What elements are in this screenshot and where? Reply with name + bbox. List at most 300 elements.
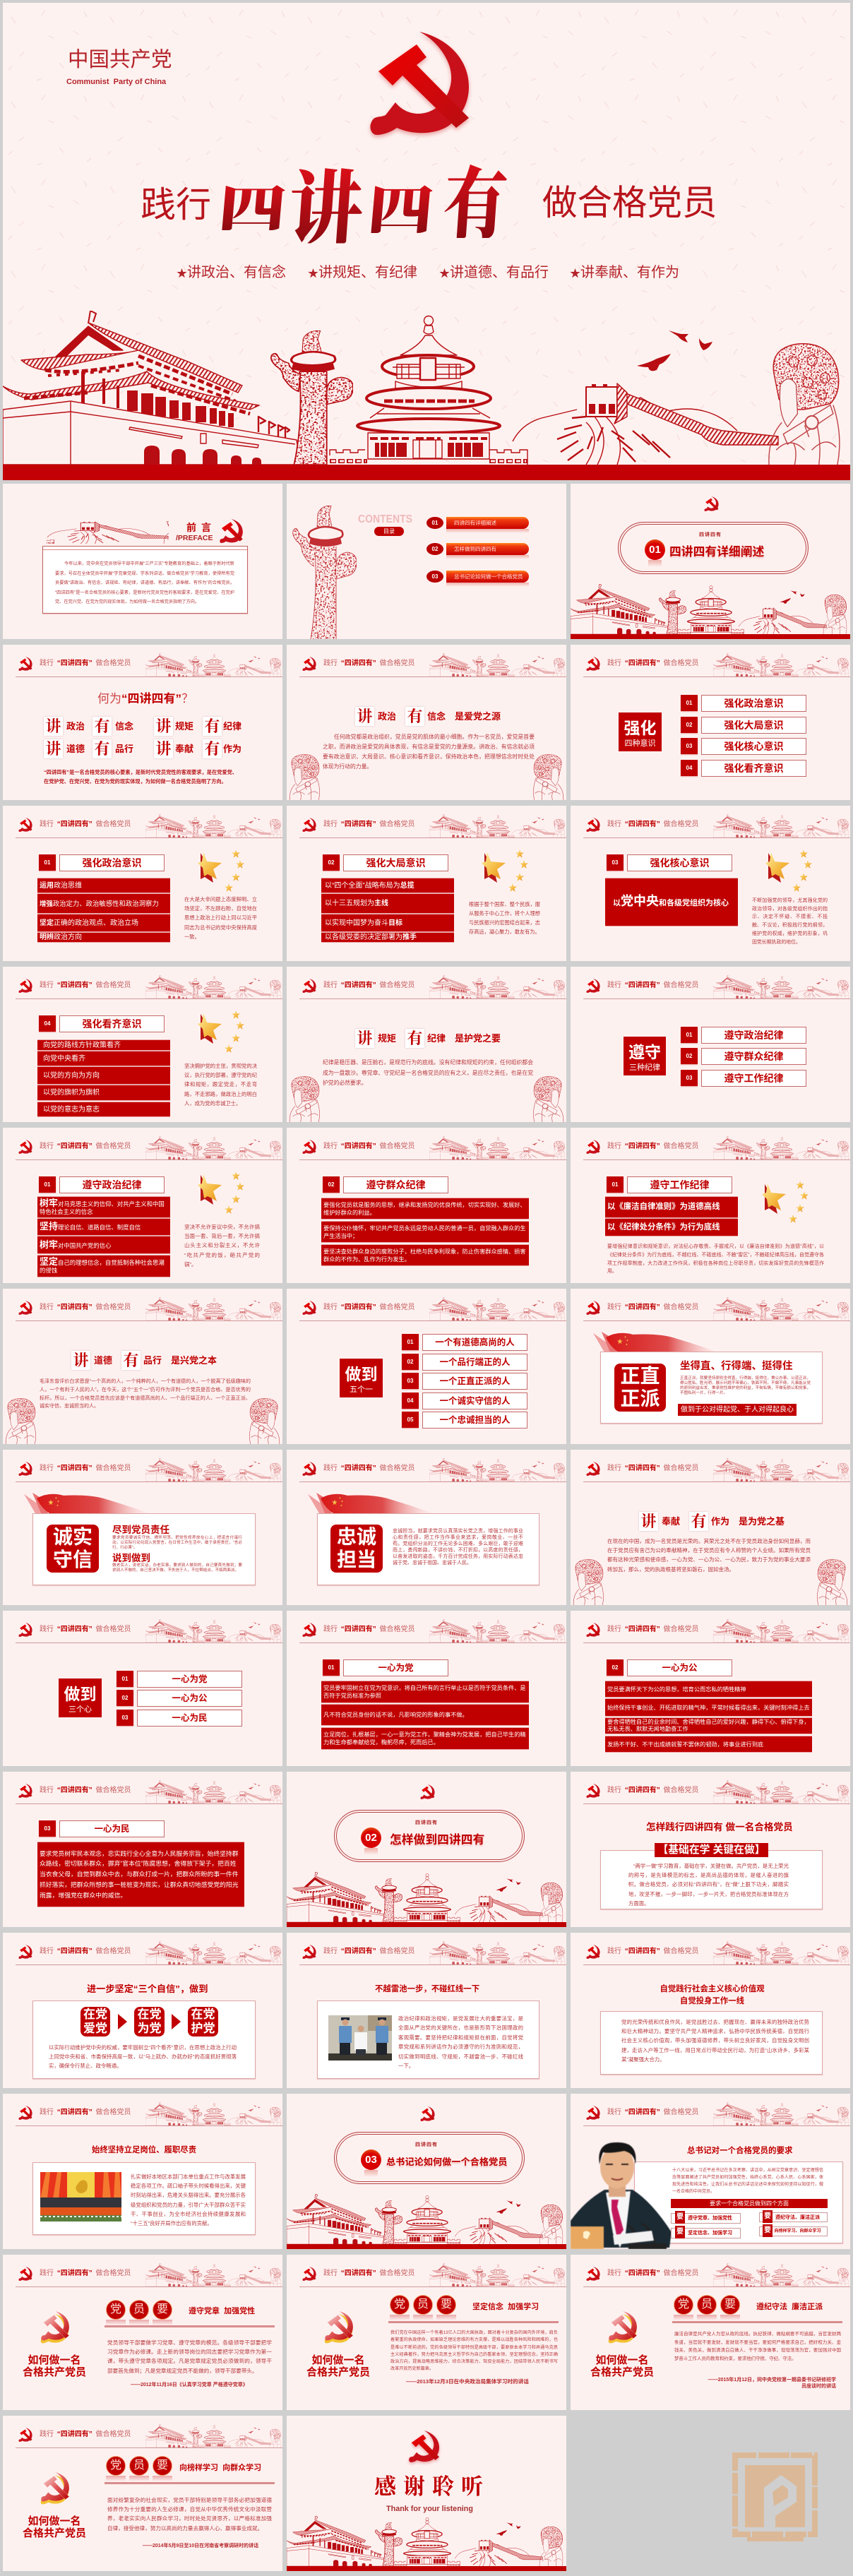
slide header: 践行 “四讲四有” 做合格党员 [323, 660, 415, 667]
box 3 [188, 2007, 218, 2037]
row 2 [321, 1705, 529, 1725]
body text: 党员领导干部要做学习党章、遵守党章的模范。各级领导干部要把学习党章作为必修课。走上新的领导岗位的同志要把学习党章作为第一课，带头遵守党章各项规定。凡是党章规定党员必须做到的，领导干部要首先做到；凡是党章规定党员不能做的，领导干部要带头。 [107, 2339, 272, 2374]
icon: emblem [419, 2106, 436, 2121]
item 03: 强化核心意识 [724, 741, 784, 752]
heading with tiles: 规矩 [378, 1033, 396, 1044]
subtitle: four pledges: ★讲奉献、有作为 [570, 265, 679, 280]
photo: court scene [328, 2015, 392, 2061]
grid of four pledges: 有 [94, 715, 110, 737]
subtitle: four pledges: ★讲政治、有信念 [177, 265, 286, 280]
requirement 1 [671, 2211, 741, 2224]
panel: firm belief [287, 2255, 566, 2410]
item 03 [117, 1710, 242, 1727]
heading with tiles: 道德 [94, 1355, 112, 1366]
slide header: 践行 “四讲四有” 做合格党员 [40, 1787, 131, 1794]
row 2 [37, 1051, 170, 1066]
icon: hammer and sickle emblem [368, 32, 472, 140]
heading: 怎样践行四讲四有 做一名合格党员 [646, 1822, 793, 1832]
section pill [334, 2132, 525, 2184]
card title: 02 [328, 859, 334, 866]
card [317, 2000, 539, 2079]
section number [645, 539, 665, 560]
row 3 [37, 1067, 170, 1084]
box 2 [134, 2007, 165, 2037]
item 04 [681, 760, 806, 777]
slide header [3, 2416, 282, 2448]
slide header: 践行 “四讲四有” 做合格党员 [323, 821, 415, 828]
card title: 强化大局意识 [366, 857, 425, 869]
red callout: 做到于公对得起党、于人对得起良心 [681, 1406, 794, 1414]
section number: 02 [365, 1832, 377, 1844]
subheading: english party name: Communist Party of China [66, 78, 166, 86]
item 02: 一个品行端正的人 [439, 1357, 510, 1367]
item 01 [681, 695, 806, 712]
panel: learn from role models [3, 2416, 282, 2571]
item 01 [117, 1671, 242, 1688]
heading: preface: 前言 [186, 522, 216, 533]
panel: five ones [287, 1289, 566, 1444]
panel: hero cover slide [3, 3, 850, 480]
icon: stars [760, 1181, 810, 1224]
subheading: 坚定信念 加强学习 [472, 2303, 539, 2311]
heading with tiles: 有 [123, 1349, 138, 1371]
slide header [16, 814, 282, 838]
row 1 [605, 1197, 738, 1217]
illustration: right lion [249, 1397, 282, 1444]
row 4 [37, 1085, 170, 1100]
badge: 担当 [337, 1549, 376, 1570]
icon: emblem [409, 2431, 439, 2462]
footer band [287, 2566, 566, 2571]
item 03: 一个正直正派的人 [439, 1376, 510, 1386]
panel: devoted to the people [3, 1772, 282, 1927]
subheading: 遵纪守法 廉洁正派 [756, 2303, 823, 2311]
slide header [571, 1289, 850, 1321]
row 4: 发扬不干好、不干出成绩就誓不罢休的韧劲，将事业进行到底 [607, 1741, 763, 1747]
heading: how to be a party member: 如何做一名 [311, 2354, 364, 2366]
heading with tiles: 讲 [640, 1510, 657, 1532]
grid of four pledges: 规矩 [175, 721, 193, 732]
subtitle: four pledges: ★讲规矩、有纪律 [308, 265, 417, 280]
panel: contents [287, 484, 566, 639]
section pill [618, 522, 809, 574]
heading: 总书记对一个合格党员的要求 [687, 2147, 792, 2155]
body text: 我们党在中国这样一个有着13亿人口的大国执政，面对着十分复杂的国内外环境，肩负着繁重的执政使命，如果缺乏理论思维的有力支撑，是难以战胜各种风险和困难的，也是难以不断前进的。党的各级领导干部特别是高级干部，要原原本本学习和弄通马克思主义经典著作，努力把马克思主义哲学作为自己的看家本领，坚定理想信念，坚持正确政治方向，提高战略思维能力、综合决策能力、驾驭全局能力，团结带领人民不断书写改革开放历史新篇章。 [390, 2330, 558, 2371]
slide header: 践行 “四讲四有” 做合格党员 [323, 982, 415, 989]
title: calligraphic 四讲四有 [215, 141, 512, 261]
heading: how to be a party member: 合格共产党员 [23, 2527, 86, 2539]
side text: 根据于整个国家、整个民族，服从服务于中心工作，将个人理想与民族振兴的宏图结合起来，志存高远，凝心聚力，敢友有为。 [469, 901, 540, 935]
row 1: 运用政治思维 [40, 881, 82, 890]
row 3: 坚定正确的政治观点、政治立场 [40, 919, 138, 926]
card heading: 坐得直、行得端、挺得住 [680, 1361, 792, 1372]
illustration: great wall [47, 521, 169, 544]
heading with tiles: 讲 [357, 1027, 373, 1049]
card [600, 2011, 823, 2075]
slide header: 践行 “四讲四有” 做合格党员 [607, 982, 699, 989]
panel: work discipline [571, 1128, 850, 1283]
slide header [3, 1289, 282, 1321]
heading 2: 说到做到 [112, 1553, 150, 1563]
icon: glossy emblem [606, 2306, 640, 2344]
item 05 [402, 1412, 527, 1429]
badges: 党员要: 党 [110, 2303, 121, 2315]
slide header [571, 1933, 850, 1965]
slide header [287, 2255, 566, 2287]
panel: core awareness [571, 806, 850, 961]
slide header: 践行 “四讲四有” 做合格党员 [607, 1143, 699, 1150]
badge [47, 1525, 99, 1573]
list item 03 [426, 571, 529, 586]
label: catalogue [374, 527, 404, 536]
section number [361, 1827, 381, 1848]
slide header [287, 1933, 566, 1965]
grid of four pledges: 奉献 [175, 744, 193, 754]
item 01: 01 [122, 1676, 128, 1682]
badges: 党员要 [390, 2295, 457, 2321]
card title [606, 854, 732, 871]
row 4: 以党的旗帜为旗帜 [43, 1089, 100, 1097]
slide header [3, 1933, 282, 1965]
slide header [287, 1289, 566, 1321]
card title [323, 1659, 448, 1676]
row 3 [37, 914, 170, 931]
row 5: 以党的意志为意志 [43, 1106, 100, 1113]
panel: learn and act [571, 1772, 850, 1927]
card title [607, 1659, 732, 1676]
text box: preface body [42, 546, 248, 614]
illustration: skyline [571, 584, 847, 634]
illustration: skyline [287, 1872, 566, 1922]
panel: aligned awareness [3, 967, 282, 1122]
card title [38, 854, 165, 871]
grid of four pledges: 有 [204, 737, 220, 759]
panel: four awarenesses [571, 645, 850, 800]
item 03: 一心为民 [172, 1713, 208, 1723]
row 4: 坚定自己的理想信念，自觉抵制各种社会思潮的侵蚀 [40, 1256, 165, 1274]
box 1 [80, 2007, 110, 2037]
item 02: 一心为公 [172, 1693, 208, 1703]
requirement 3: 遵纪守法、廉洁正派 [775, 2215, 820, 2220]
icon: emblem [220, 519, 243, 543]
slide header [571, 967, 850, 999]
row 2 [605, 1219, 738, 1236]
red label box [340, 1359, 383, 1397]
card [32, 2162, 256, 2235]
row 4 [37, 933, 170, 942]
slide header: 践行 “四讲四有” 做合格党员 [323, 2270, 415, 2277]
row 3 [321, 1728, 529, 1749]
heading with tiles: 奉献 [662, 1516, 680, 1527]
small text 2: 做老实人，说老实话，办老实事。要求别人做到的，自己要首先做到；要求别人不做的，自己坚决不做。不失信于人，不拉帮结派，不搞两面派。 [112, 1563, 242, 1573]
item 01: 一心为党 [172, 1674, 208, 1684]
item 03: 03 [407, 1378, 413, 1384]
slide header [287, 1450, 566, 1482]
heading with tiles: 作为 [711, 1516, 729, 1527]
title: calligraphic 四讲四有: 四 [364, 167, 438, 245]
row 3: 以党的方向为方向 [43, 1072, 100, 1079]
small text 1: 要求党员要诚实守信、襟怀坦荡，把党性修养放在心上，把诺言付诸行动，以实际行动兑现入党誓言，在日常工作生活中，敢于承担责任，“言必行、行必果”。 [112, 1536, 242, 1550]
panel: section 03 [287, 2094, 566, 2249]
row 2 [321, 1222, 529, 1242]
subtitle: four pledges: ★讲道德、有品行 [439, 265, 549, 280]
heading with tiles [71, 1351, 217, 1370]
row 2: 始终保持干事创业、开拓进取的精气神，平常时候看得出来，关键时刻冲得上去 [607, 1705, 810, 1710]
heading: 自觉投身工作一线 [680, 1997, 744, 2005]
red label box [624, 1037, 666, 1075]
heading: 始终坚持立足岗位、履职尽责 [92, 2146, 196, 2154]
heading with tiles: 信念 [427, 711, 446, 722]
body text: 毛泽东曾评价白求恩是“一个高尚的人，一个纯粹的人，一个有道德的人，一个脱离了低级趣味的人，一个有利于人民的人”。在今天，这个“五个一”仍可作为评判一个党员是否合格、是否优秀的标杆。所以，一个合格党员首先应该是个有道德高尚的人、一个品行端正的人、一个正直正派、诚实守信、忠诚担当的人。 [40, 1379, 251, 1409]
slide header [571, 2255, 850, 2287]
slide header [299, 975, 566, 999]
body text: 要增强纪律意识和规矩意识，对法纪心存敬畏、手握戒尺，以《廉洁自律准则》为道德“高线”，以《纪律处分条件》为行为底线，不越红线、不碰底线、不触“雷区”，不触碰纪律高压线，自觉遵守各项工作规章制度，大力改进工作作风，积极在各种岗位上尽职尽责，切实发挥好党员的先锋模范作用。 [607, 1244, 824, 1274]
source citation: ——2012年11月16日《认真学习党章 严格遵守党章》 [131, 2383, 248, 2387]
heading: 何为“四讲四有”？ [97, 692, 193, 705]
card title: 01 [328, 1664, 334, 1671]
badge [330, 1525, 383, 1573]
panel: three disciplines [571, 967, 850, 1122]
badges: 党员要: 党 [394, 2298, 405, 2310]
row 2: 要保持公仆情怀，牢记共产党员永远是劳动人民的普通一员，自觉融入群众的生产生活当中； [323, 1224, 526, 1239]
requirement 4: 向榜样学习、向群众学习 [774, 2229, 821, 2234]
slide header: 践行 “四讲四有” 做合格党员 [323, 1143, 415, 1150]
row 2: 增强政治定力、政治敏感性和政治洞察力 [40, 900, 159, 907]
row 1 [37, 1040, 170, 1050]
body text: 以实际行动维护党中央的权威，要牢固树立“四个看齐”意识，在思想上政治上行动上同党中央和省、市委保持高度一致，以“马上就办、办就办好”的态度抓好贯彻落实，确保令行禁止、政令畅通。 [49, 2044, 237, 2069]
icon: stars [482, 849, 528, 892]
card title: 一心为公 [662, 1663, 698, 1673]
icon: stars [198, 849, 244, 892]
row 1 [321, 1198, 529, 1219]
slide header [583, 814, 850, 838]
card [32, 1513, 256, 1585]
requirement 2 [671, 2226, 741, 2238]
badges: 党员要: 党 [110, 2459, 121, 2471]
item 02: 遵守群众纪律 [724, 1051, 784, 1062]
red label box: 三个心 [68, 1705, 92, 1714]
heading: 进一步坚定“三个自信”，做到 [87, 1984, 208, 1994]
panel: speak politics [287, 645, 566, 800]
photo: speaker at podium [571, 2142, 672, 2249]
requirement 4 [759, 2224, 828, 2237]
row 2 [605, 1699, 812, 1716]
red label box: 做到 [345, 1365, 377, 1383]
red label box: 五个一 [350, 1385, 373, 1394]
item 02: 02 [407, 1359, 413, 1365]
section pill [334, 1810, 525, 1862]
card title: 遵守政治纪律 [82, 1179, 141, 1191]
section kicker: 四讲四有 [415, 2142, 438, 2147]
list item 01: 四讲四有详细阐述 [454, 520, 496, 526]
badges: 党员要: 要 [441, 2298, 452, 2310]
heading: how to be a party member [590, 2354, 654, 2378]
box 1: 爱党 [83, 2022, 107, 2035]
badges: 党员要: 要 [157, 2459, 168, 2471]
box 2: 为党 [137, 2022, 161, 2035]
heading: how to be a party member [23, 2354, 86, 2378]
slide header: 践行 “四讲四有” 做合格党员 [323, 1304, 415, 1311]
heading: how to be a party member: 如何做一名 [28, 2354, 80, 2366]
illustration: right lion [817, 1558, 850, 1605]
subheading: 向榜样学习 向群众学习 [179, 2464, 261, 2472]
slide header [3, 1772, 282, 1804]
row 3: 以实现中国梦为奋斗目标 [325, 919, 402, 926]
card [317, 1513, 539, 1585]
subtitle: four pledges [177, 264, 679, 280]
box 3: 护党 [191, 2022, 215, 2035]
slide header: 践行 “四讲四有” 做合格党员 [40, 660, 131, 667]
row 1: 以“四个全面”战略布局为总揽 [325, 881, 414, 890]
item 03: 03 [122, 1715, 128, 1721]
box 2: 在党 [137, 2008, 161, 2021]
slide header: 践行 “四讲四有” 做合格党员 [607, 1948, 699, 1955]
body text: 扎实做好本地区本部门本单位重点工作与改革发展稳定各项工作。疏口袖子带头时候看得出来，关键时刻站得出来，危难关头豁得出来。要充分展示各级党组织和党员的力量，引导广大干部群众苦干实干、干事创业，为全市经济社会持续健康发展和“十三五”良好开局作出应有的贡献。 [131, 2174, 246, 2226]
badge [614, 1364, 666, 1412]
slide header [571, 1611, 850, 1643]
heading with tiles: 是护党之要 [455, 1033, 501, 1044]
card [634, 2161, 843, 2243]
panel: what is four-speak four-have [3, 645, 282, 800]
title: calligraphic 四讲四有: 有 [440, 141, 512, 256]
item 02: 02 [122, 1695, 128, 1701]
slide header: 践行 “四讲四有” 做合格党员 [607, 2270, 699, 2277]
card title: 03 [612, 859, 618, 866]
number reflection [648, 560, 662, 567]
red label box [59, 1678, 102, 1717]
item 01: 一个有道德高尚的人 [435, 1337, 515, 1347]
red statement box: 以党中央和各级党组织为核心 [613, 894, 729, 908]
panel: three hearts [3, 1611, 282, 1766]
item 01: 01 [686, 1032, 692, 1038]
card title [322, 854, 448, 871]
list item 03: 03 [432, 573, 438, 580]
badge: 忠诚 [337, 1526, 376, 1548]
card title: 遵守工作纪律 [650, 1179, 709, 1191]
card title: 03 [44, 1825, 50, 1832]
card title: 一心为民 [94, 1824, 130, 1834]
item 02: 02 [686, 722, 692, 728]
section kicker: 四讲四有 [415, 1820, 438, 1825]
body text: 廉洁自律是共产党人为官从政的底线。执纪铁律、做贴纲要不可逾越，当官发财两条道，当官就不要发财，发财就不要当官。要如何严格要求自己，把好权力关、金钱关、美色关，做到清清白白做人、干干净净做事，坦坦荡荡为官，要加强对中国梦奋斗工作人员的教育和约束，要求他们守德、守纪、守法。 [674, 2332, 841, 2361]
heading: how to be a party member: 合格共产党员 [590, 2366, 654, 2378]
heading with tiles: 讲 [73, 1349, 89, 1371]
illustration: huabiao column [292, 506, 357, 639]
badges: 党员要: 员 [417, 2298, 429, 2310]
card [600, 1352, 823, 1424]
slide header [16, 975, 282, 999]
side text: 不断加强党的领导，尤其强化党的政治领导，对各级党组织作出的指示、决定不怀疑、不摸索、不抵触、不议论，积极践行党的纲领，维护党的权威，维护党的形象，巩固党长期执政的地位。 [752, 898, 828, 945]
icon: stars [196, 1171, 246, 1215]
row 3: 要舍得牺牲自己的业余时间、舍得牺牲自己的爱好兴趣，静得下心、俯得下身，无私无畏、默默无闻地勤奋工作 [607, 1719, 810, 1732]
item 02 [681, 1048, 806, 1065]
list item 01: 01 [432, 520, 438, 526]
text box: preface body: 今年以来，党中央在党员领导干部中开展“三严三实”专题教育的基础上，着眼于新时代新要求，号召在全体党员中开展“学党章党规、学系列讲话、做合格党员”学习教育，使得所有党员要做“讲政治、有信念，讲规矩、有纪律，讲道德、有品行，讲奉献、有作为”的合格党员。“四讲四有”是一名合格党员的核心要素，是新时代党员党性的客观要求，是在党爱党、在党护党、在党兴党、在党为党的现实体现，为如何做一名合格党员指明了方向。 [55, 561, 234, 604]
body text: 党的光荣传统和优良作风，是党战胜过去、把握现在、赢得未来的独特政治优势和巨大精神动力。要坚守共产党人精神追求，弘扬中华民族传统美德，自觉践行社会主义核心价值观，带头加强道德修养，带头树立良好家风，自觉投身文明创建，走访入户等工作一线，用日常点行带动全民行动，为打造“山水诗乡、多彩某某”凝聚强大合力。 [621, 2019, 809, 2063]
red callout [678, 1404, 797, 1416]
slide header: 践行 “四讲四有” 做合格党员 [607, 1465, 699, 1472]
panel: no red line [287, 1933, 566, 2088]
divider bar [388, 2321, 559, 2323]
row 2: 坚持理论自信、道路自信、制度自信 [40, 1221, 141, 1232]
row 3: 树牢对中国共产党的信心 [40, 1239, 111, 1250]
slide header: 践行 “四讲四有” 做合格党员 [323, 1948, 415, 1955]
card title: 04 [44, 1020, 50, 1027]
row 2: 向党中央看齐 [43, 1055, 85, 1062]
heading with tiles [354, 1027, 501, 1049]
slide header [583, 653, 850, 677]
card title [39, 1176, 165, 1193]
illustration: left lion [290, 754, 320, 800]
grid of four pledges: 讲 [155, 715, 171, 737]
grid of four pledges [43, 715, 241, 759]
icon: emblem [419, 1784, 436, 1799]
icon: emblem [705, 496, 719, 511]
heading with tiles [639, 1512, 785, 1531]
row 2: 凡不符合党员身份的话不说，凡影响党的形象的事不做。 [323, 1712, 468, 1718]
slide header [3, 1128, 282, 1160]
section number: 03 [365, 2154, 377, 2166]
item 02: 02 [686, 1053, 692, 1059]
section number: 01 [649, 544, 661, 556]
list item 02 [426, 543, 529, 559]
panel: core values [571, 1933, 850, 2088]
row 1 [321, 878, 454, 893]
red label box: 遵守 [628, 1043, 661, 1061]
slide header [16, 653, 282, 677]
panel: section 02 [287, 1772, 566, 1927]
red label box: 三种纪律 [629, 1063, 660, 1072]
badges: 党员要: 党 [678, 2298, 689, 2310]
red label: 【基础在学 关键在做】 [657, 1844, 765, 1856]
item 03: 03 [686, 743, 692, 749]
summary text: “四讲四有”是一名合格党员的核心要素，是新时代党员党性的客观要求，是在党爱党、在党护党、在党兴党、在党为党的现实体现，为如何做一名合格党员指明了方向。 [44, 769, 237, 785]
item 01: 强化政治意识 [724, 698, 784, 709]
heading with tiles: 是为党之基 [739, 1516, 785, 1527]
panel: preface [3, 484, 282, 639]
panel: devoted to the public [571, 1611, 850, 1766]
slide header: 践行 “四讲四有” 做合格党员 [323, 1626, 415, 1633]
badge: 守信 [53, 1549, 93, 1570]
item 04: 04 [407, 1397, 413, 1404]
card title: 强化政治意识 [82, 857, 141, 869]
slide header: 践行 “四讲四有” 做合格党员 [607, 1304, 699, 1311]
panel: speak rules [287, 967, 566, 1122]
row 1: 以《廉洁自律准则》为道德高线 [607, 1203, 720, 1211]
section title: 总书记论如何做一个合格党员 [386, 2157, 507, 2167]
item 04: 04 [686, 765, 692, 771]
slide header: 践行 “四讲四有” 做合格党员 [323, 1465, 415, 1472]
heading: party name: 中国共产党 [68, 48, 172, 71]
body text: 面对纷繁复杂的社会现实，党员干部特别是领导干部务必把加强道德修养作为十分重要的人生必修课，自觉从中华优秀传统文化中汲取营养，老老实实向人民群众学习，时时处处见贤思齐，以严格标准加强自律，接受他律，努力以高尚的力量去赢得人心、赢得事业成就。 [107, 2497, 272, 2532]
illustration: left lion [3, 1397, 36, 1444]
card title [607, 1176, 732, 1193]
row 1 [321, 1681, 529, 1703]
grid of four pledges: 政治 [66, 721, 85, 732]
slide header: 践行 “四讲四有” 做合格党员 [40, 1626, 131, 1633]
requirement 3 [759, 2210, 828, 2223]
section number [361, 2149, 381, 2170]
item 05: 05 [407, 1417, 413, 1423]
badge: 诚实 [53, 1526, 93, 1548]
slide header: 践行 “四讲四有” 做合格党员 [607, 660, 699, 667]
slide header: 践行 “四讲四有” 做合格党员 [40, 821, 131, 828]
row 3 [321, 914, 454, 931]
row 1: 要强化党员就是服务的思想，继承和发扬党的优良传统，切实实现好、发展好、维护好群众的利益。 [323, 1202, 526, 1216]
list item 02: 02 [432, 546, 438, 552]
illustration: skyline [287, 2516, 566, 2566]
requirement 2: 坚定信念、加强学习 [688, 2231, 732, 2236]
